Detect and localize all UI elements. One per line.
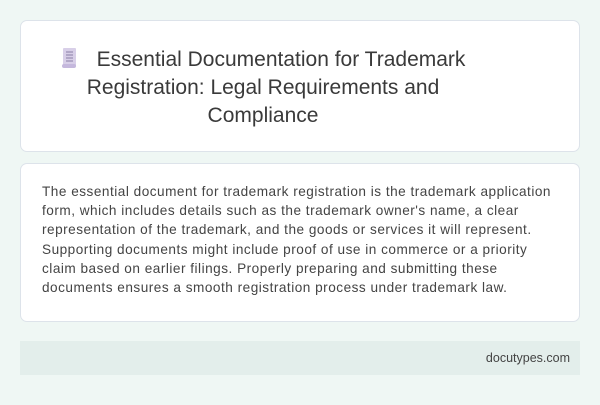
title: Compliance [208,104,318,127]
text block: claim based on earlier filings. Properly preparing and submitting these [42,261,498,276]
text block: representation of the trademark, and the goods or services it will represent. [42,222,532,237]
panel: description [20,163,580,322]
panel: title card [20,20,580,152]
text block: The essential document for trademark registration is the trademark application [42,184,551,199]
footer [20,341,580,375]
text block: Supporting documents might include proof of use in commerce or a priority [42,242,527,257]
title: Registration: Legal Requirements and [87,76,439,99]
text block [42,184,551,295]
title: Essential Documentation for Trademark [97,48,465,71]
text block: documents ensures a smooth registration process under trademark law. [42,280,507,295]
text block: form, which includes details such as the trademark owner's name, a clear [42,203,519,218]
footer: docutypes.com [486,351,570,365]
title [62,48,466,127]
icon: document [62,48,76,68]
